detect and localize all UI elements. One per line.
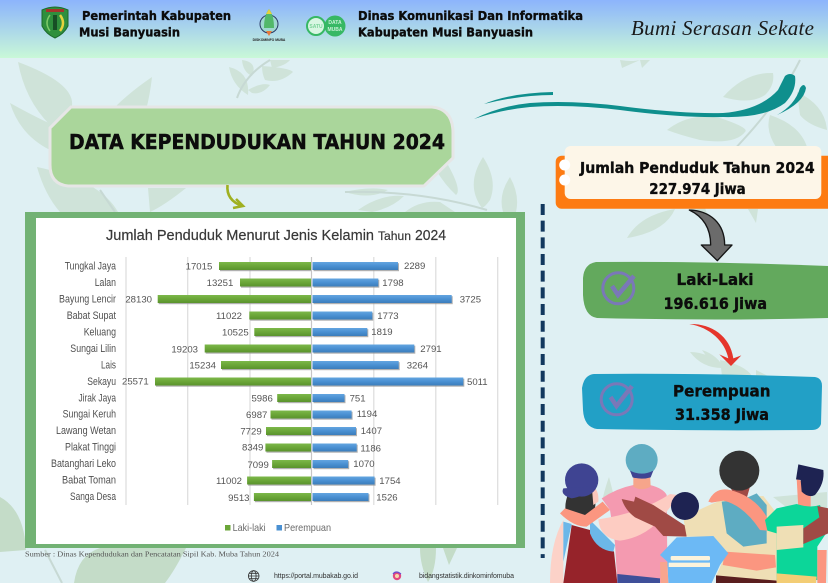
row: Babat Supat bbox=[67, 310, 399, 322]
logo: diskominfo rocket: DISKOMINFO MUBA bbox=[253, 38, 286, 42]
row: Tungkal Jaya bbox=[65, 260, 425, 272]
left man's arm bbox=[598, 494, 677, 541]
row: Sanga Desa: 1526 bbox=[376, 492, 398, 504]
chart title: Tahun bbox=[378, 231, 411, 243]
row: Lais: 3264 bbox=[407, 360, 429, 372]
row: Batanghari Leko: Batanghari Leko bbox=[51, 458, 116, 470]
chart panel bbox=[25, 212, 525, 548]
row: Bayung Lencir: 3725 bbox=[460, 294, 481, 306]
footer website: https://portal.mubakab.go.id bbox=[274, 573, 358, 580]
organisation name bbox=[79, 8, 231, 40]
row: Lalan: 13251 bbox=[207, 278, 233, 289]
row: Jirak Jaya: 751 bbox=[350, 394, 366, 404]
row: Sungai Keruh bbox=[63, 408, 378, 421]
row: Lalan: Lalan bbox=[95, 277, 116, 289]
row: Babat Supat: 1773 bbox=[377, 311, 399, 322]
footer website bbox=[248, 571, 358, 581]
logo: satu data muba: SATU bbox=[309, 24, 323, 30]
legend: Laki-laki bbox=[233, 523, 266, 534]
title banner bbox=[50, 107, 453, 186]
row: Keluang: Keluang bbox=[84, 326, 116, 338]
row: Babat Toman: 11002 bbox=[216, 476, 242, 487]
row: Plakat Tinggi: 8349 bbox=[242, 442, 263, 454]
background leaves bbox=[10, 60, 827, 510]
row: Lalan: 1798 bbox=[382, 278, 404, 289]
vertical dashed divider bbox=[541, 204, 545, 558]
row: Lais: 15234 bbox=[189, 360, 217, 372]
row: Batanghari Leko: 7099 bbox=[247, 460, 269, 471]
row: Plakat Tinggi: Plakat Tinggi bbox=[65, 442, 116, 454]
footer instagram: bidangstatistik.dinkominfomuba bbox=[419, 573, 514, 580]
row: Lais bbox=[101, 360, 429, 372]
row: Sanga Desa bbox=[70, 491, 398, 504]
dark arm across bbox=[622, 497, 687, 537]
illustration: group of people embracing bbox=[550, 444, 828, 583]
chart title: 2024 bbox=[415, 227, 446, 244]
legend: Perempuan bbox=[284, 523, 331, 534]
row: Plakat Tinggi: 1186 bbox=[360, 444, 381, 454]
row: Plakat Tinggi bbox=[65, 442, 381, 454]
row: Sungai Lilin bbox=[70, 343, 442, 356]
row: Batanghari Leko: 1070 bbox=[353, 459, 375, 470]
footer instagram bbox=[393, 572, 514, 580]
row: Keluang: 10525 bbox=[222, 328, 249, 338]
row: Sekayu: 25571 bbox=[122, 376, 149, 388]
row: Tungkal Jaya: 2289 bbox=[404, 261, 425, 272]
icon: instagram bbox=[393, 572, 401, 580]
script slogan: Bumi Serasan Sekate bbox=[631, 16, 814, 40]
logo: diskominfo rocket bbox=[253, 9, 286, 42]
department name bbox=[358, 8, 583, 40]
row: Sungai Keruh: 6987 bbox=[246, 410, 267, 421]
row: Bayung Lencir: Bayung Lencir bbox=[59, 294, 116, 306]
female population card: 31.358 Jiwa bbox=[675, 405, 769, 424]
row: Lawang Wetan: Lawang Wetan bbox=[56, 425, 116, 437]
logo: satu data muba: MUBA bbox=[328, 27, 343, 33]
row: Sungai Keruh: 1194 bbox=[357, 409, 378, 420]
female population card bbox=[582, 374, 822, 430]
icon: globe bbox=[248, 571, 259, 581]
big man in cream bbox=[683, 451, 803, 583]
row: Keluang: 1819 bbox=[371, 327, 393, 338]
row: Lawang Wetan: 7729 bbox=[240, 426, 262, 438]
row: Babat Supat: 11022 bbox=[216, 311, 242, 322]
arrow: red down bbox=[689, 324, 741, 366]
row: Sungai Lilin: Sungai Lilin bbox=[70, 343, 116, 355]
row: Tungkal Jaya: Tungkal Jaya bbox=[65, 260, 116, 272]
row: Babat Toman: Babat Toman bbox=[62, 474, 116, 486]
legend bbox=[225, 523, 331, 534]
total population card bbox=[556, 146, 828, 209]
source note: Sumber : Dinas Kependudukan dan Pencatatan Sipil Kab. Muba Tahun 2024 bbox=[25, 550, 279, 558]
row: Bayung Lencir: 28130 bbox=[125, 294, 152, 306]
row: Jirak Jaya: 5986 bbox=[251, 394, 273, 404]
logo: kabupaten shield bbox=[42, 7, 68, 38]
row: Batanghari Leko bbox=[51, 458, 375, 471]
row: Sekayu: Sekayu bbox=[87, 376, 116, 388]
row: Sanga Desa: Sanga Desa bbox=[70, 491, 116, 503]
person in green bbox=[765, 464, 828, 583]
female population card: Perempuan bbox=[673, 382, 770, 401]
woman in red bbox=[550, 463, 617, 583]
chart title: Jumlah Penduduk Menurut Jenis Kelamin bbox=[106, 227, 374, 244]
child in blue bbox=[660, 492, 728, 583]
male population card: Laki-Laki bbox=[676, 270, 754, 289]
logo: satu data muba: DATA bbox=[328, 20, 342, 26]
row: Babat Supat: Babat Supat bbox=[67, 310, 116, 322]
row: Tungkal Jaya: 17015 bbox=[186, 262, 212, 272]
row: Sekayu bbox=[87, 376, 488, 388]
organisation name: Musi Banyuasin bbox=[79, 24, 180, 40]
row: Lawang Wetan bbox=[56, 425, 382, 438]
logo: satu data muba bbox=[307, 16, 346, 36]
header band bbox=[0, 0, 828, 58]
arrow: title to chart bbox=[227, 185, 243, 208]
department name: Dinas Komunikasi Dan Informatika bbox=[358, 8, 583, 23]
male population card bbox=[583, 262, 828, 320]
row: Bayung Lencir bbox=[59, 294, 481, 306]
row: Sanga Desa: 9513 bbox=[228, 493, 250, 504]
total population card: 227.974 Jiwa bbox=[649, 180, 746, 198]
row: Sekayu: 5011 bbox=[467, 377, 488, 388]
row: Sungai Lilin: 19203 bbox=[171, 344, 198, 356]
male population card: 196.616 Jiwa bbox=[664, 294, 767, 313]
title text: DATA KEPENDUDUKAN TAHUN 2024 bbox=[69, 130, 445, 154]
decorative teal ribbon bbox=[474, 74, 806, 119]
department name: Kabupaten Musi Banyuasin bbox=[358, 24, 533, 40]
row: Jirak Jaya bbox=[78, 392, 366, 404]
icon: check badge bbox=[603, 273, 634, 304]
row: Sungai Keruh: Sungai Keruh bbox=[63, 408, 116, 420]
row: Keluang bbox=[84, 326, 393, 338]
row: Lalan bbox=[95, 277, 404, 289]
row: Lawang Wetan: 1407 bbox=[361, 426, 382, 437]
row: Lais: Lais bbox=[101, 360, 116, 372]
row: Jirak Jaya: Jirak Jaya bbox=[78, 392, 116, 404]
row: Babat Toman: 1754 bbox=[379, 476, 401, 487]
man in pink bbox=[560, 444, 667, 583]
row: Babat Toman bbox=[62, 474, 401, 487]
organisation name: Pemerintah Kabupaten bbox=[82, 8, 231, 23]
arrow: gray down bbox=[689, 210, 732, 261]
icon: check badge bbox=[601, 384, 632, 415]
row: Sungai Lilin: 2791 bbox=[420, 344, 442, 355]
